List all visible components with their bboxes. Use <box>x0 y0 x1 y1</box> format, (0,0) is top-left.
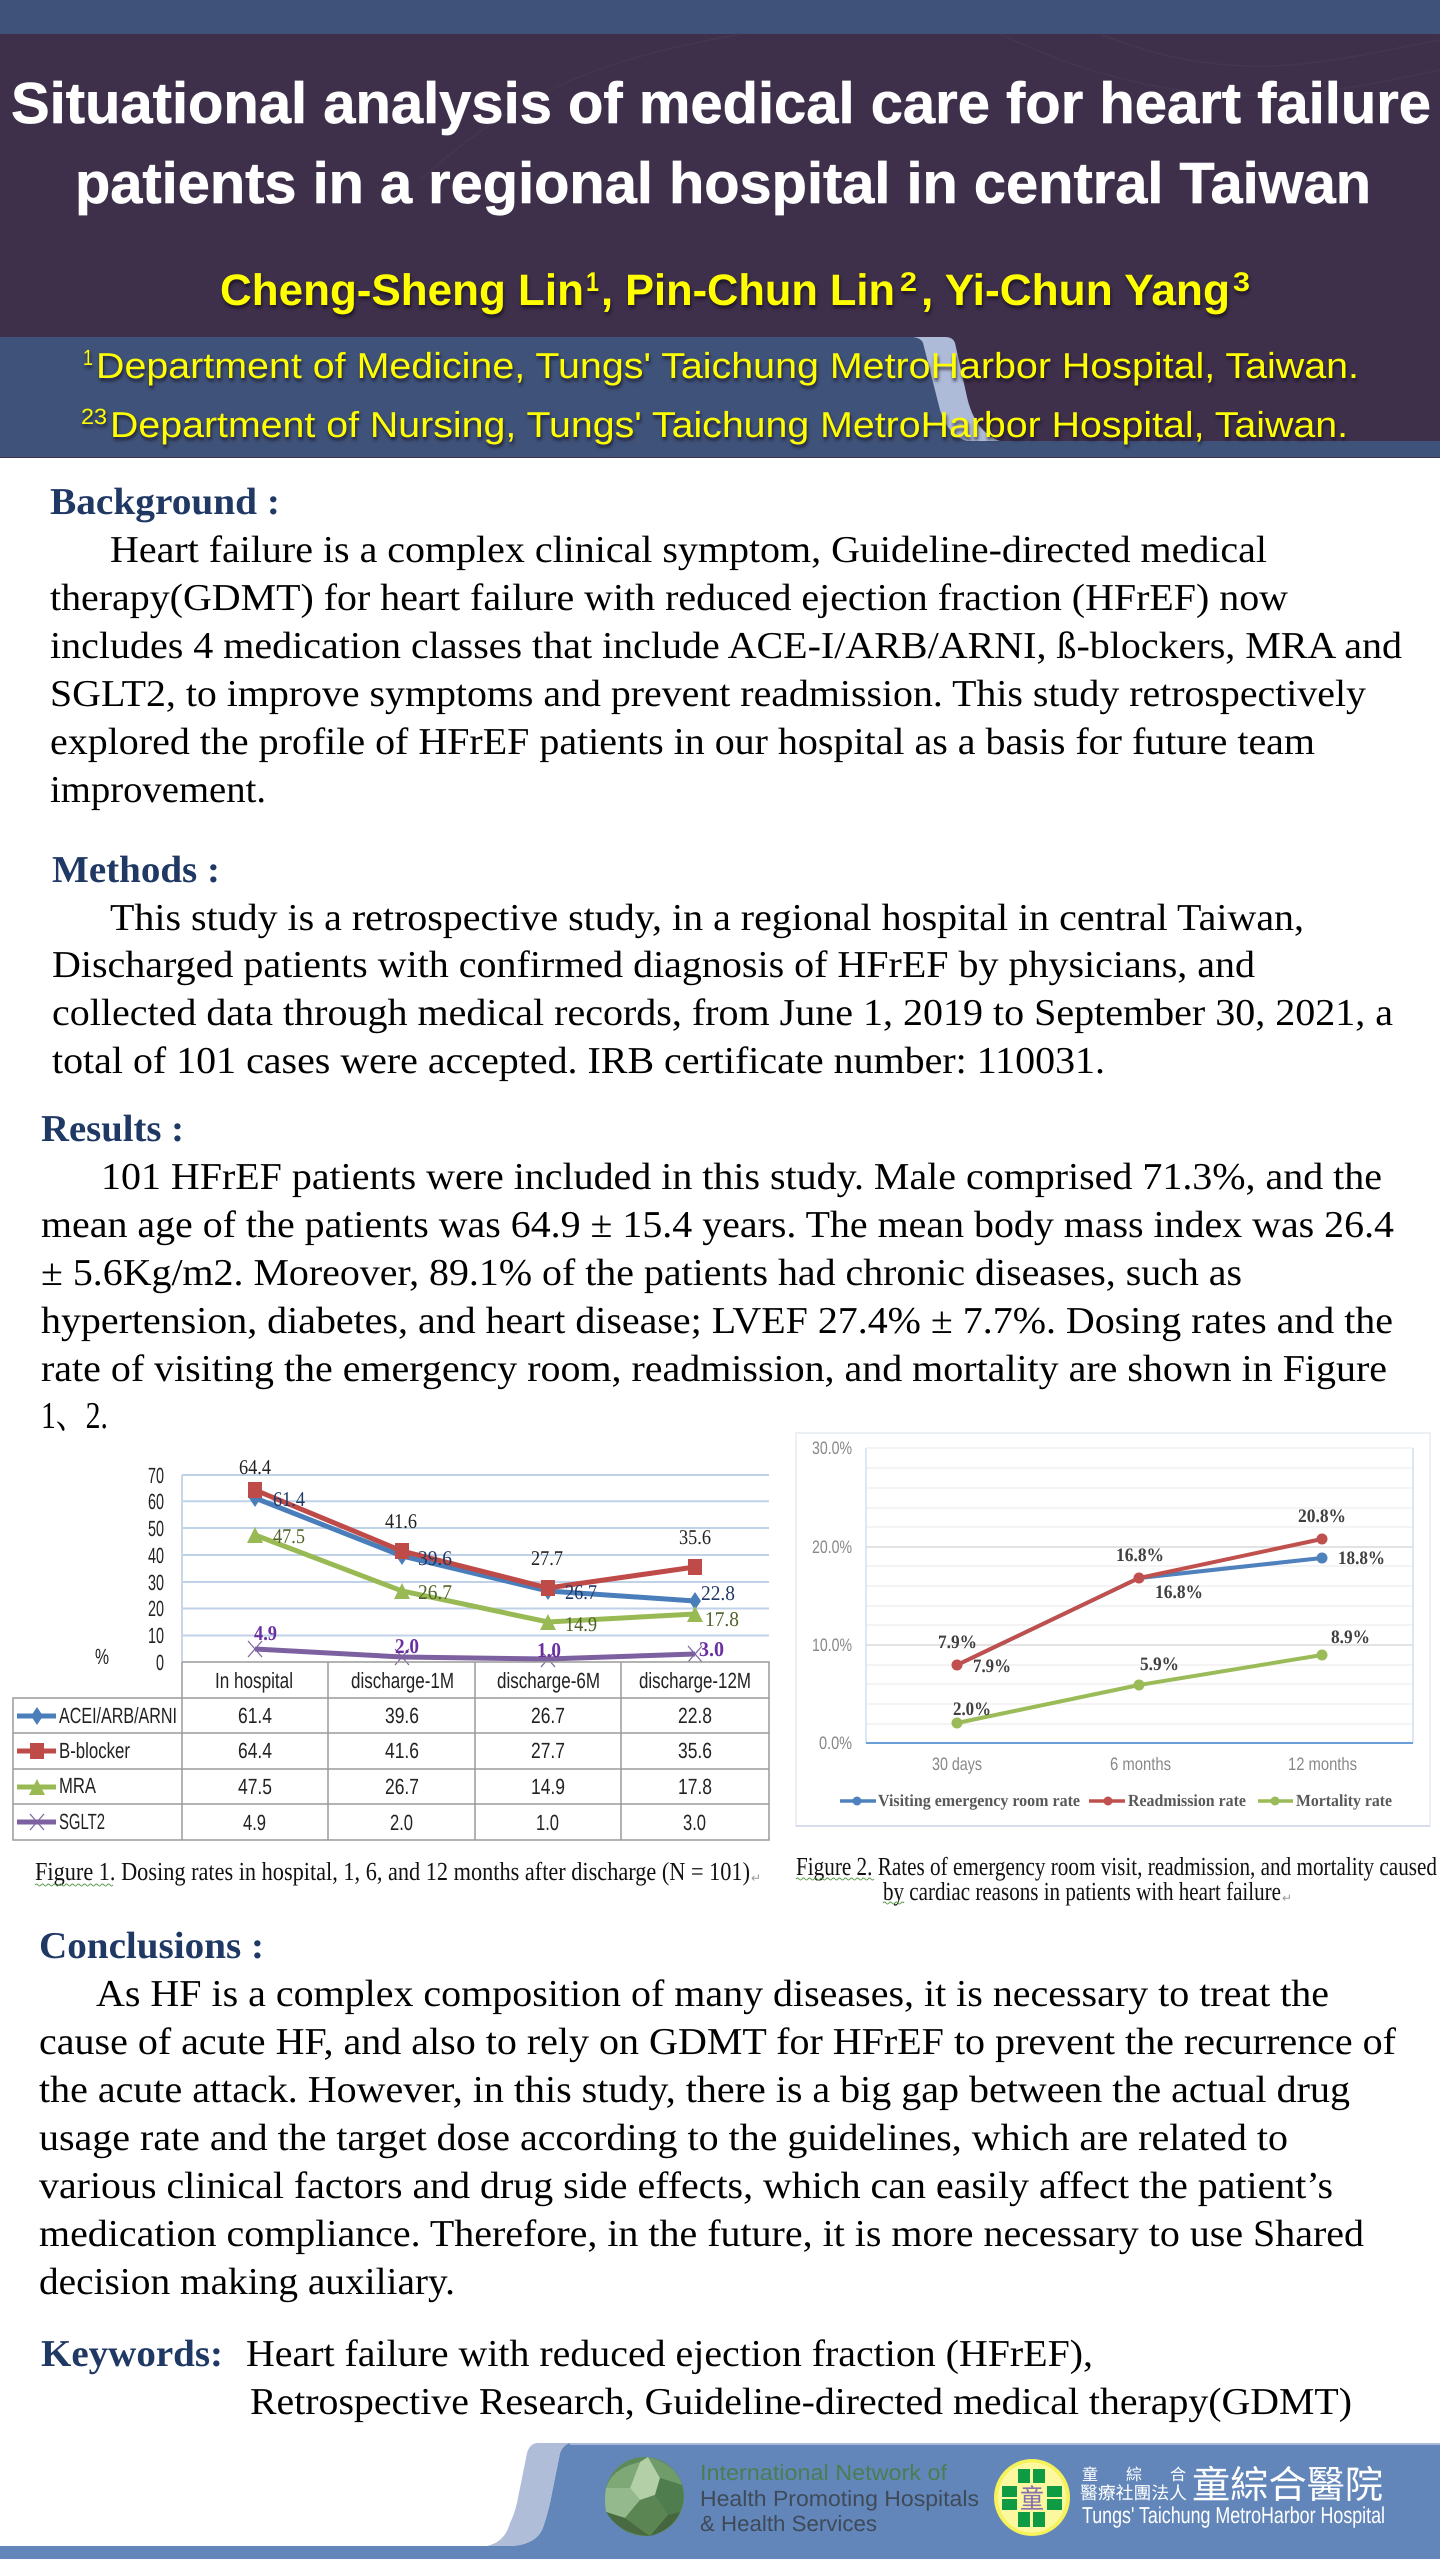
series: B-blocker <box>248 1482 702 1596</box>
data labels: 7.9% <box>938 1632 977 1653</box>
affiliations: Department of Nursing, Tungs' Taichung MetroHarbor Hospital, Taiwan. <box>110 404 1348 445</box>
legend row: MRA <box>17 1773 712 1799</box>
heading: methods: Methods : <box>52 849 220 891</box>
icon: HPH gem logo <box>605 2457 684 2536</box>
series: ACEI/ARB/ARNI <box>249 1489 701 1610</box>
heading: results: Results : <box>41 1108 184 1150</box>
data labels: 14.9 <box>565 1612 597 1636</box>
x axis labels <box>932 1754 1357 1774</box>
text block: results: rate of visiting the emergency room, readmission, and mortality are shown in Figure <box>41 1348 1387 1390</box>
affiliations: Department of Medicine, Tungs' Taichung MetroHarbor Hospital, Taiwan. <box>96 345 1359 386</box>
data labels: 2.0% <box>953 1699 991 1720</box>
data labels: 26.7 <box>565 1580 597 1604</box>
text block: keywords <box>246 2333 1352 2423</box>
legend row: MRA: 47.5 <box>238 1774 272 1799</box>
text block: results: ± 5.6Kg/m2. Moreover, 89.1% of the patients had chronic diseases, such as <box>41 1252 1242 1294</box>
heading: keywords: Keywords: <box>41 2333 223 2375</box>
figure 1: dosing rates line chart and table <box>13 1455 769 1840</box>
y axis labels: 30.0% <box>812 1438 852 1458</box>
data labels: 16.8% <box>1155 1582 1203 1603</box>
y axis labels: 60 <box>148 1489 164 1514</box>
y axis labels: 30 <box>148 1570 164 1595</box>
series: visiting emergency room rate <box>957 1552 1328 1665</box>
legend: Visiting emergency room rate <box>878 1791 1080 1810</box>
data table <box>13 1662 769 1840</box>
text block: conclusions: decision making auxiliary. <box>39 2261 455 2303</box>
y axis labels: 0.0% <box>819 1733 852 1753</box>
legend row: MRA: 26.7 <box>385 1774 419 1799</box>
data table: discharge-6M <box>497 1668 600 1693</box>
legend row: SGLT2: 3.0 <box>683 1810 706 1835</box>
text block: conclusions: medication compliance. Therefore, in the future, it is more necessary to use Shared <box>39 2213 1364 2255</box>
text block: conclusions: various clinical factors and drug side effects, which can easily affect the patient’s <box>39 2165 1333 2207</box>
title: Situational analysis of medical care for heart failure <box>11 71 1431 136</box>
legend: Mortality rate <box>1296 1791 1392 1810</box>
legend row: B-blocker <box>17 1738 712 1763</box>
data labels: 26.7 <box>418 1580 452 1604</box>
y axis labels: 0 <box>156 1650 164 1675</box>
data labels: 3.0 <box>699 1637 724 1661</box>
legend row: ACEI/ARB/ARNI: 61.4 <box>238 1703 272 1728</box>
legend row: MRA: 14.9 <box>531 1774 565 1799</box>
data labels: 39.6 <box>418 1546 452 1570</box>
x axis labels: 12 months <box>1288 1754 1357 1774</box>
data labels: 1.0 <box>537 1638 561 1662</box>
data labels: 17.8 <box>705 1607 739 1631</box>
text block: background: improvement. <box>50 769 266 811</box>
panel: background <box>50 481 1402 811</box>
data labels: 41.6 <box>385 1509 417 1533</box>
data labels: 61.4 <box>273 1487 305 1511</box>
text block: background <box>50 529 1402 811</box>
text block: conclusions: the acute attack. However, in this study, there is a big gap between the actual drug <box>39 2069 1350 2111</box>
heading: background: Background : <box>50 481 280 523</box>
data table: discharge-12M <box>639 1668 751 1693</box>
figure 1 caption: Figure 1. Dosing rates in hospital, 1, 6, and 12 months after discharge (N = 101) <box>35 1857 750 1886</box>
data labels: 8.9% <box>1331 1627 1370 1648</box>
text block: methods: This study is a retrospective study, in a regional hospital in central Taiwan, <box>110 897 1304 939</box>
y axis labels: 20.0% <box>812 1537 852 1557</box>
legend <box>840 1791 1392 1810</box>
text block: results: 1、2. <box>41 1395 108 1437</box>
data labels: 5.9% <box>1140 1654 1179 1675</box>
text block: results: 101 HFrEF patients were included in this study. Male comprised 71.3%, and the <box>101 1156 1382 1198</box>
y axis labels <box>812 1438 852 1753</box>
panel: methods <box>52 849 1393 1082</box>
figure 2 caption: by cardiac reasons in patients with heart failure <box>883 1877 1281 1906</box>
text block: conclusions: As HF is a complex composition of many diseases, it is necessary to treat the <box>96 1973 1329 2015</box>
text block: results: hypertension, diabetes, and heart disease; LVEF 27.4% ± 7.7%. Dosing rates and the <box>41 1300 1393 1342</box>
authors <box>220 266 1250 315</box>
panel: results <box>41 1108 1394 1437</box>
text block: background: includes 4 medication classes that include ACE-I/ARB/ARNI, ß-blockers, MRA and <box>50 625 1402 667</box>
data labels: 4.9 <box>254 1621 277 1645</box>
header banner <box>0 0 1440 458</box>
text: hospital name: 童 綜 合 <box>1082 2466 1186 2484</box>
series: mortality rate <box>952 1650 1328 1728</box>
legend row: B-blocker: 41.6 <box>385 1738 419 1763</box>
data labels: 2.0 <box>395 1634 419 1658</box>
affiliations <box>81 345 1359 445</box>
authors: Cheng-Sheng Lin <box>220 266 584 315</box>
legend row: ACEI/ARB/ARNI: ACEI/ARB/ARNI <box>59 1703 177 1728</box>
legend: Readmission rate <box>1128 1791 1246 1810</box>
legend row: ACEI/ARB/ARNI <box>17 1703 712 1728</box>
text block: conclusions: cause of acute HF, and also to rely on GDMT for HFrEF to prevent the recurrence of <box>39 2021 1396 2063</box>
legend row: B-blocker: 35.6 <box>678 1738 712 1763</box>
legend row: SGLT2: SGLT2 <box>59 1809 105 1834</box>
series: SGLT2 <box>248 1641 702 1667</box>
legend row: ACEI/ARB/ARNI: 26.7 <box>531 1703 565 1728</box>
data labels: 64.4 <box>239 1455 271 1479</box>
text: HPH network name: & Health Services <box>700 2511 877 2536</box>
series: readmission rate <box>952 1534 1328 1670</box>
authors: 2 <box>900 267 917 297</box>
text block: results <box>41 1156 1394 1437</box>
data labels: 7.9% <box>973 1656 1011 1677</box>
text: HPH network name: International Network of <box>700 2460 948 2485</box>
authors: , Yi-Chun Yang <box>921 266 1230 315</box>
text: hospital name: 醫療社團法人 <box>1080 2483 1187 2503</box>
text: hospital name <box>1080 2465 1385 2528</box>
data labels: 20.8% <box>1298 1506 1346 1527</box>
figure 2: rates line chart <box>796 1433 1430 1826</box>
authors: 3 <box>1233 267 1250 297</box>
data labels: 35.6 <box>679 1525 711 1549</box>
affiliations: 1 <box>83 345 93 370</box>
icon: hospital emblem: 童 <box>1020 2484 1044 2514</box>
x axis labels: 6 months <box>1110 1754 1171 1774</box>
y axis labels: 40 <box>148 1543 164 1568</box>
legend row: B-blocker: 64.4 <box>238 1738 272 1763</box>
figure 2 caption <box>796 1852 1437 1906</box>
text block: methods: collected data through medical records, from June 1, 2019 to September 30, 2021, a <box>52 992 1393 1034</box>
text: HPH network name: Health Promoting Hospitals <box>700 2486 979 2511</box>
data table: discharge-1M <box>351 1668 454 1693</box>
data table: In hospital <box>215 1668 293 1693</box>
y axis labels: 50 <box>148 1516 164 1541</box>
text block: background: therapy(GDMT) for heart failure with reduced ejection fraction (HFrEF) now <box>50 577 1289 619</box>
legend row: SGLT2: 4.9 <box>243 1810 266 1835</box>
text: hospital name: 童綜合醫院 <box>1192 2465 1383 2507</box>
panel: keywords <box>41 2333 1352 2423</box>
icon: hospital emblem <box>994 2459 1070 2536</box>
affiliations: 23 <box>81 404 107 429</box>
text block: background: SGLT2, to improve symptoms and prevent readmission. This study retrospectively <box>50 673 1366 715</box>
text: HPH network name <box>700 2460 979 2536</box>
figure 2 caption: ↵ <box>1282 1891 1292 1905</box>
series: MRA <box>247 1527 703 1630</box>
text block: background: explored the profile of HFrEF patients in our hospital as a basis for future team <box>50 721 1315 763</box>
data labels: 16.8% <box>1116 1545 1164 1566</box>
legend row: ACEI/ARB/ARNI: 39.6 <box>385 1703 419 1728</box>
legend row: B-blocker: B-blocker <box>59 1738 130 1763</box>
y axis labels: 10 <box>148 1623 164 1648</box>
text block: conclusions <box>39 1973 1396 2303</box>
heading: conclusions: Conclusions : <box>39 1925 264 1967</box>
figure 1 caption: ↵ <box>751 1871 761 1885</box>
data labels <box>938 1506 1385 1720</box>
y axis labels: 10.0% <box>812 1635 852 1655</box>
text block: background: Heart failure is a complex clinical symptom, Guideline-directed medical <box>110 529 1267 571</box>
authors: , Pin-Chun Lin <box>601 266 895 315</box>
footer banner <box>0 2443 1440 2559</box>
legend row: SGLT2: 2.0 <box>390 1810 413 1835</box>
panel: conclusions <box>39 1925 1396 2303</box>
text block: methods: total of 101 cases were accepted. IRB certificate number: 110031. <box>52 1040 1105 1082</box>
authors: 1 <box>586 267 599 297</box>
text block: results: mean age of the patients was 64.9 ± 15.4 years. The mean body mass index was 26.4 <box>41 1204 1394 1246</box>
data labels <box>239 1455 739 1662</box>
text block: methods <box>52 897 1393 1082</box>
y axis labels <box>95 1463 164 1675</box>
legend row: MRA: MRA <box>59 1773 96 1798</box>
text block: keywords: Heart failure with reduced ejection fraction (HFrEF), <box>246 2333 1093 2375</box>
data labels: 27.7 <box>531 1546 563 1570</box>
legend row: MRA: 17.8 <box>678 1774 712 1799</box>
text block: keywords: Retrospective Research, Guideline-directed medical therapy(GDMT) <box>250 2381 1352 2423</box>
data labels: 18.8% <box>1338 1548 1385 1569</box>
data labels: 22.8 <box>701 1581 735 1605</box>
text block: conclusions: usage rate and the target dose according to the guidelines, which are related to <box>39 2117 1288 2159</box>
data labels: 47.5 <box>273 1524 305 1548</box>
y axis labels: 70 <box>148 1463 164 1488</box>
legend row: SGLT2: 1.0 <box>536 1810 559 1835</box>
legend row: ACEI/ARB/ARNI: 22.8 <box>678 1703 712 1728</box>
legend row: SGLT2 <box>17 1809 706 1835</box>
x axis labels: 30 days <box>932 1754 982 1774</box>
title <box>11 71 1431 216</box>
text block: methods: Discharged patients with confirmed diagnosis of HFrEF by physicians, and <box>52 944 1255 986</box>
y axis labels: % <box>95 1644 109 1669</box>
y axis labels: 20 <box>148 1596 164 1621</box>
title: patients in a regional hospital in central Taiwan <box>75 151 1371 216</box>
legend row: B-blocker: 27.7 <box>531 1738 565 1763</box>
